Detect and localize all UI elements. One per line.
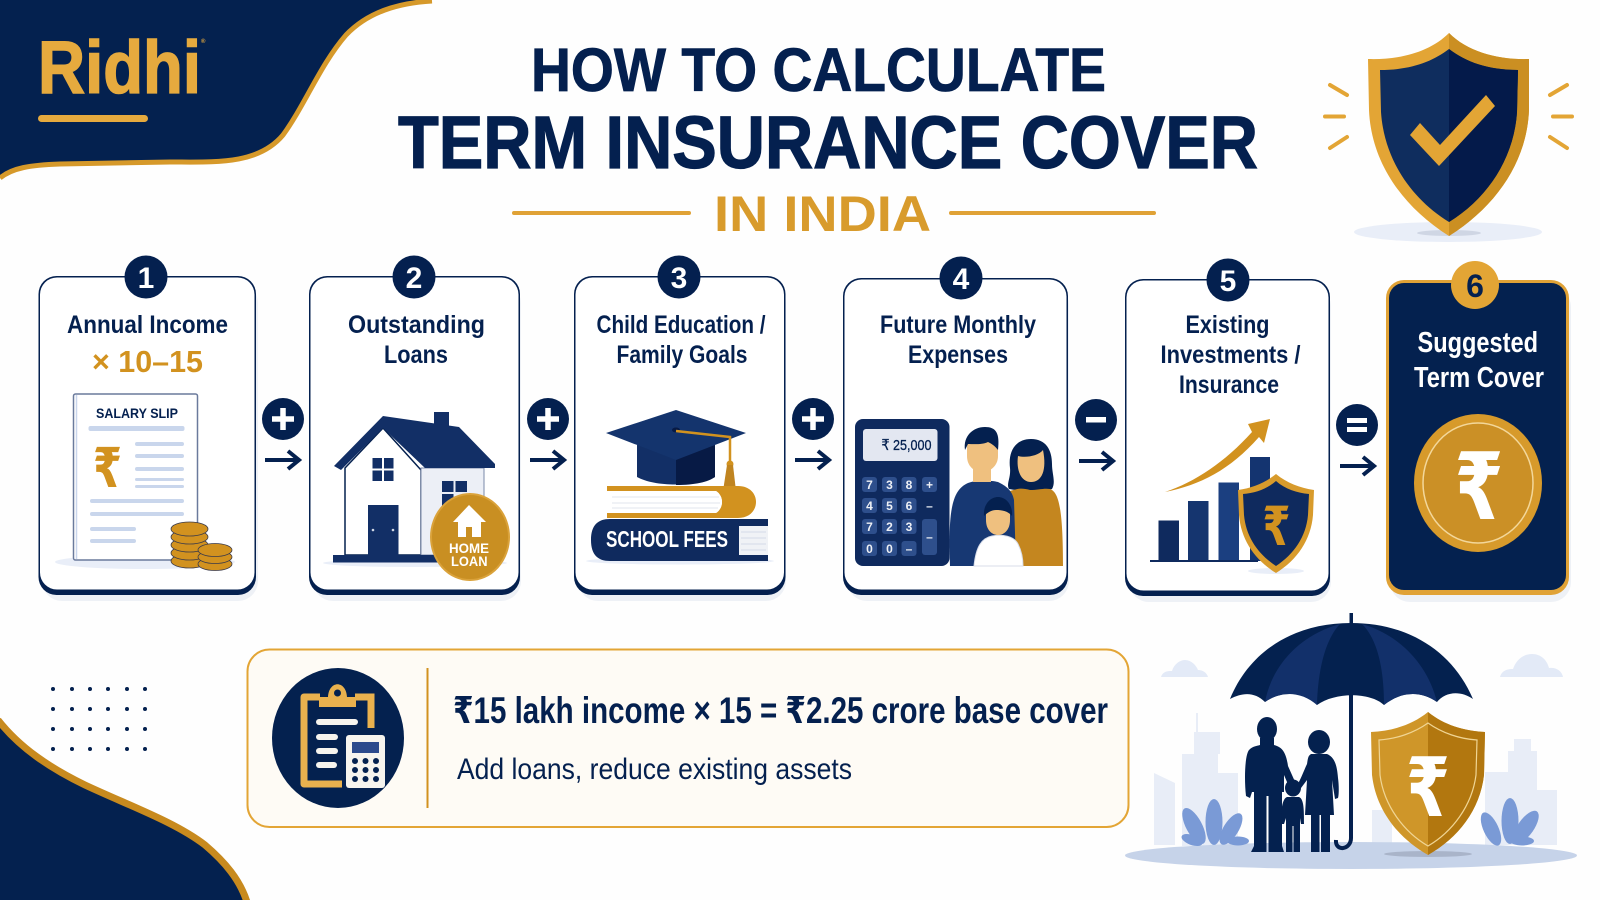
icon: calculator: 7: [866, 520, 873, 534]
icon: calculator: 0: [866, 542, 873, 556]
step number 2: 2: [406, 262, 422, 295]
icon: clipboard with calculator: [272, 668, 404, 808]
operator: plus 3: [792, 398, 834, 440]
icon: shield with check mark: [1325, 33, 1572, 242]
heading: suggested term cover: Term Cover: [1414, 362, 1544, 394]
icon: calculator: ₹ 25,000: [882, 437, 932, 454]
operator: minus: [1075, 399, 1117, 441]
icon: calculator: 4: [866, 499, 873, 513]
icon: calculator: 3: [906, 520, 913, 534]
decoration: dot grid: [51, 687, 147, 751]
arrow 5: [1340, 457, 1374, 475]
heading: suggested term cover: Suggested: [1418, 327, 1538, 359]
umbrella: [1230, 613, 1473, 848]
multiplier: × 10–15: [92, 344, 203, 379]
icon: calculator: 0: [886, 542, 893, 556]
step number 1: [124, 256, 168, 298]
icon: growth chart with shield: [1150, 419, 1314, 574]
icon: house with home loan coin: [323, 412, 509, 580]
icon: calculator: –: [906, 542, 913, 556]
title: IN INDIA: [714, 186, 931, 242]
heading: suggested term cover: [1414, 327, 1544, 394]
icon: calculator: 6: [906, 499, 913, 513]
title: HOW TO CALCULATE: [531, 36, 1106, 104]
heading: child education: Family Goals: [616, 341, 748, 369]
note text: Add loans, reduce existing assets: [457, 753, 852, 786]
icon: salary slip and coins: [55, 394, 235, 570]
callout: worked example: [248, 650, 1128, 827]
icon: calculator: 5: [886, 499, 893, 513]
icon: calculator: 2: [886, 520, 893, 534]
step number 1: 1: [138, 262, 154, 295]
step number 5: 5: [1220, 265, 1236, 298]
arrow 3: [795, 451, 829, 469]
illustration: family under umbrella with shield: [1125, 613, 1577, 869]
corner shape: bottom-left navy: [0, 720, 247, 900]
icon: calculator: +: [926, 478, 933, 492]
heading: existing investments: Investments /: [1160, 341, 1301, 369]
arrow 2: [530, 451, 564, 469]
icon: salary slip and coins: SALARY SLIP: [96, 405, 178, 421]
logo: Ridhi: Ridhi: [38, 26, 201, 109]
icon: family: [950, 427, 1063, 566]
step number 5: [1206, 258, 1250, 302]
background: city and clouds: [1154, 654, 1563, 846]
operator: equals: [1336, 404, 1378, 446]
plants: [1178, 798, 1543, 848]
arrow 1: [265, 451, 299, 469]
logo: Ridhi: ®: [201, 38, 206, 45]
step number 4: [940, 256, 982, 300]
icon: rupee coin: [1414, 414, 1542, 552]
icon: calculator: 7: [866, 478, 873, 492]
formula text: ₹15 lakh income × 15 = ₹2.25 crore base cover: [453, 690, 1108, 731]
step number 4: 4: [953, 263, 970, 296]
step number 2: [392, 256, 436, 298]
icon: calculator: 8: [906, 478, 913, 492]
shield with rupee: ₹: [1406, 743, 1450, 834]
icon: calculator: [855, 419, 950, 566]
operator: plus 2: [527, 398, 569, 440]
panel: step 3 child education: [574, 256, 786, 601]
icon: graduation cap on books: SCHOOL FEES: [606, 526, 728, 552]
heading: child education: [596, 311, 766, 369]
heading: existing investments: Existing: [1186, 311, 1270, 339]
operator: plus 1: [262, 398, 304, 440]
corner shape: top-left navy: [0, 0, 432, 178]
arrow 4: [1079, 452, 1113, 470]
heading: child education: Child Education /: [596, 311, 766, 339]
icon: graduation cap on books: [586, 410, 774, 564]
step number 6: 6: [1466, 268, 1484, 304]
icon: rupee coin: ₹: [1454, 435, 1504, 539]
heading: outstanding loans: Outstanding: [348, 311, 485, 339]
panel: step 2 outstanding loans: [309, 256, 521, 601]
heading: outstanding loans: [348, 311, 485, 369]
step number 6: [1451, 261, 1499, 309]
icon: calculator: 3: [886, 478, 893, 492]
heading: existing investments: [1160, 311, 1301, 399]
heading: future monthly expenses: [880, 311, 1036, 369]
title: [398, 36, 1258, 242]
step number 3: 3: [671, 262, 687, 295]
panel: step 1 annual income: [38, 256, 258, 601]
panel: step 4 future monthly expenses: [843, 256, 1069, 601]
step number 3: [658, 256, 700, 298]
heading: future monthly expenses: Expenses: [908, 341, 1008, 369]
icon: house with home loan coin: HOME: [449, 540, 489, 556]
icon: calculator: –: [926, 499, 933, 513]
heading: annual income: Annual Income: [67, 311, 228, 339]
panel: step 6 suggested term cover: [1386, 261, 1571, 602]
icon: salary slip and coins: ₹: [93, 437, 122, 499]
heading: future monthly expenses: Future Monthly: [880, 311, 1036, 339]
heading: existing investments: Insurance: [1179, 371, 1279, 399]
icon: growth chart with shield: ₹: [1262, 497, 1290, 557]
shield with rupee: [1371, 712, 1485, 857]
icon: calculator: –: [926, 530, 933, 544]
title: TERM INSURANCE COVER: [398, 101, 1258, 184]
family silhouette: [1245, 717, 1339, 852]
heading: outstanding loans: Loans: [384, 341, 448, 369]
panel: step 5 existing investments: [1125, 258, 1331, 602]
ground: [1125, 842, 1577, 869]
icon: house with home loan coin: LOAN: [451, 553, 488, 569]
